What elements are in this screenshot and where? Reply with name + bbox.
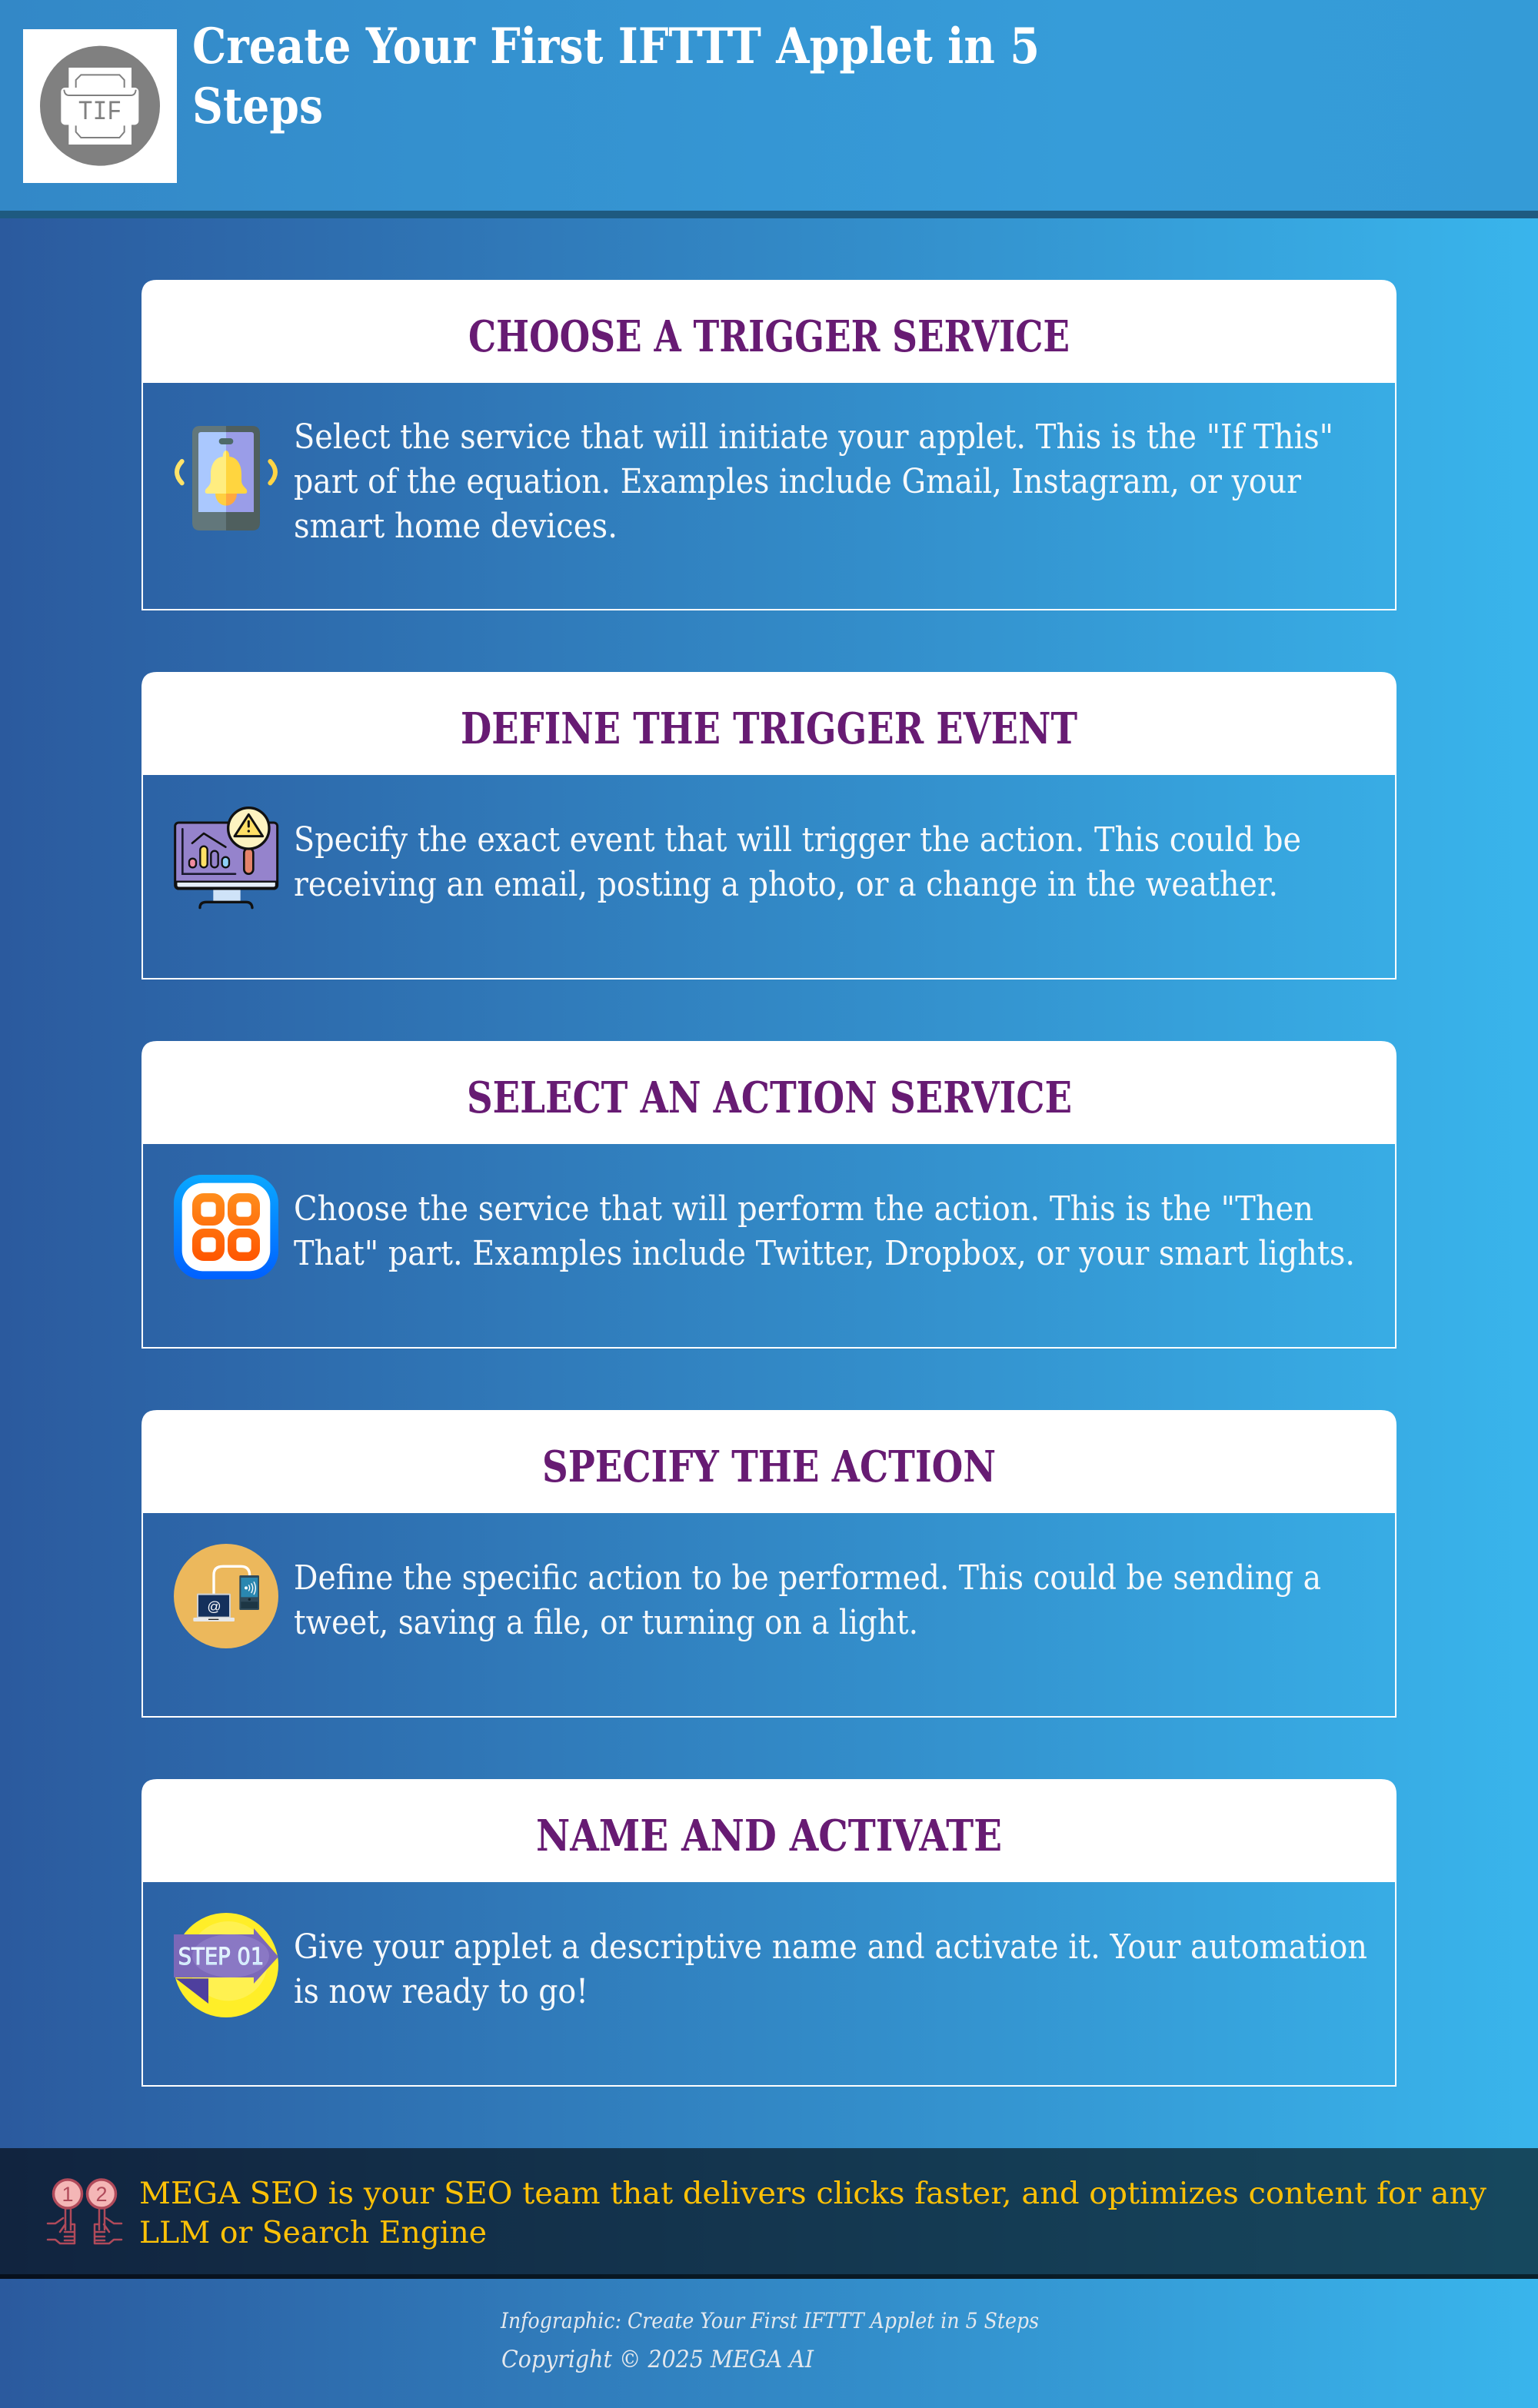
banner text: MEGA SEO is your SEO team that delivers clicks faster, and optimizes content for any xyxy=(139,2177,1486,2211)
heading: DEFINE THE TRIGGER EVENT xyxy=(461,703,1077,754)
description: tweet, saving a file, or turning on a light. xyxy=(294,1603,918,1642)
description: Specify the exact event that will trigger the action. This could be xyxy=(294,820,1301,860)
banner text: LLM or Search Engine xyxy=(139,2216,487,2250)
icon: phone with bell xyxy=(177,426,275,530)
description xyxy=(294,1558,1321,1642)
icon: monitor with warning magnifier xyxy=(175,808,278,908)
banner: mega seo xyxy=(0,2148,1538,2279)
icon: hands holding numbered signs: 2 xyxy=(95,2183,108,2206)
description: Select the service that will initiate your applet. This is the "If This" xyxy=(294,417,1333,457)
logo: TIF file icon: TIF xyxy=(78,97,122,128)
heading: NAME AND ACTIVATE xyxy=(536,1811,1002,1861)
icon: step 01 arrow: STEP 01 xyxy=(178,1944,264,1971)
footer text: Infographic: Create Your First IFTTT Applet in 5 Steps xyxy=(500,2308,1039,2333)
description xyxy=(294,820,1301,904)
title: Steps xyxy=(192,78,323,135)
icon: hands holding numbered signs xyxy=(48,2180,122,2243)
icon: laptop connected to phone xyxy=(174,1544,278,1648)
description xyxy=(294,1189,1355,1273)
description xyxy=(294,1927,1367,2011)
footer text xyxy=(500,2308,1039,2373)
footer text: Copyright © 2025 MEGA AI xyxy=(501,2346,814,2373)
icon: app grid xyxy=(174,1175,278,1279)
description: Define the specific action to be performed. This could be sending a xyxy=(294,1558,1321,1598)
title xyxy=(192,18,1040,135)
description: smart home devices. xyxy=(294,507,618,546)
description: Choose the service that will perform the action. This is the "Then xyxy=(294,1189,1313,1229)
heading: SPECIFY THE ACTION xyxy=(542,1442,996,1492)
icon: step 01 arrow xyxy=(174,1913,278,2017)
panel: step 5 name and activate xyxy=(141,1779,1397,2086)
description: That" part. Examples include Twitter, Dropbox, or your smart lights. xyxy=(294,1234,1355,1273)
description: receiving an email, posting a photo, or a change in the weather. xyxy=(294,865,1278,904)
heading: CHOOSE A TRIGGER SERVICE xyxy=(468,311,1070,362)
logo: TIF file icon xyxy=(23,29,177,183)
icon: hands holding numbered signs: 1 xyxy=(62,2183,74,2206)
header xyxy=(0,0,1538,218)
description: Give your applet a descriptive name and activate it. Your automation xyxy=(294,1927,1367,1967)
title: Create Your First IFTTT Applet in 5 xyxy=(192,18,1040,75)
description: is now ready to go! xyxy=(294,1972,588,2011)
heading: SELECT AN ACTION SERVICE xyxy=(467,1073,1072,1123)
description xyxy=(294,417,1333,546)
panel: step 3 select an action service xyxy=(141,1041,1397,1348)
banner text xyxy=(139,2177,1486,2250)
panel: step 4 specify the action xyxy=(141,1410,1397,1717)
panel: step 1 choose a trigger service xyxy=(141,280,1397,610)
panel: step 2 define the trigger event xyxy=(141,672,1397,979)
icon: laptop connected to phone: @ xyxy=(207,1598,221,1614)
description: part of the equation. Examples include Gmail, Instagram, or your xyxy=(294,462,1302,501)
